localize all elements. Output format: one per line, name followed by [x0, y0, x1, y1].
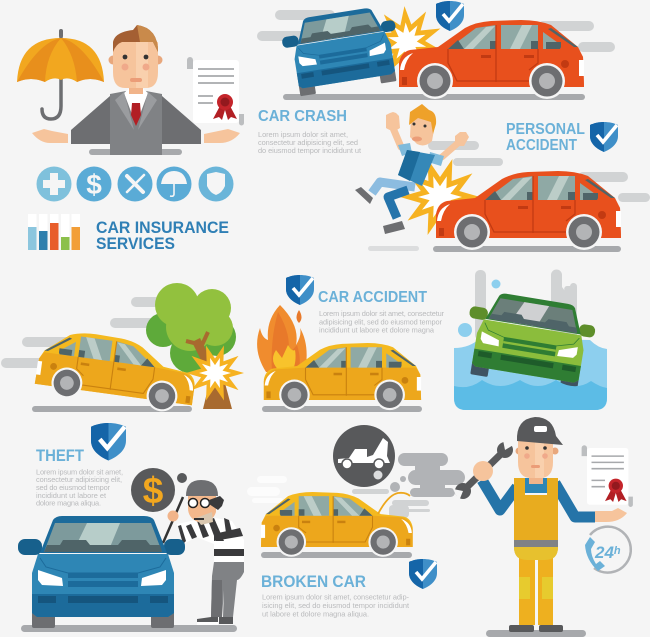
shield: broken car: [409, 559, 437, 589]
personal accident heading: [506, 121, 585, 154]
burst: personal accident: [400, 159, 480, 235]
flood scene: [454, 270, 607, 410]
certificate: [187, 57, 244, 126]
theft heading: THEFT: [36, 446, 85, 465]
red car: personal accident: [436, 171, 621, 250]
raised hood: [378, 493, 410, 514]
road: broken car: [261, 552, 412, 558]
shield: car accident: [286, 275, 314, 305]
yellow car: broken: [261, 492, 413, 557]
certificate: mechanic: [582, 445, 633, 507]
broken car text: ut labore et dolore magna aliqua.: [262, 610, 369, 618]
theft text: incididunt ut labore et: [36, 491, 106, 500]
icon: 24h support: h: [614, 545, 621, 557]
car accident text: [319, 309, 445, 334]
icon row: insurance services: [36, 166, 234, 202]
theft text: sed do eiusmod tempor: [36, 483, 111, 492]
tree: [146, 283, 236, 409]
red car: crash: [399, 20, 584, 99]
falling pedestrian: [355, 104, 469, 234]
personal accident heading: PERSONAL: [506, 121, 585, 138]
thought bubble: dollar: [131, 468, 187, 512]
heading: car insurance services: CAR INSURANCE: [96, 218, 229, 237]
yellow car: fire: [264, 343, 421, 410]
shield: theft: [91, 423, 126, 460]
shield: personal accident: [590, 122, 618, 152]
icon: 24h support: 24: [595, 543, 614, 562]
smoke trails: blue car and red car: [1, 10, 650, 368]
burst: tree: [186, 345, 244, 401]
theft text: consectetur adipisicing elit,: [36, 475, 122, 484]
icon: umbrella: [17, 29, 104, 119]
road: personal accident: [368, 246, 621, 252]
broken car heading: BROKEN CAR: [261, 572, 366, 591]
road: theft: [21, 625, 237, 632]
flame: [257, 305, 307, 372]
engine smoke: [352, 453, 465, 518]
steam: [247, 476, 287, 503]
mechanic: [453, 417, 627, 637]
blue car: crash: [279, 4, 404, 98]
road: car crash: [283, 94, 585, 100]
shield: car crash: [436, 1, 464, 31]
car accident text: Lorem ipsum dolor sit amet, consectetur: [319, 309, 445, 318]
theft text: Lorem ipsum dolor sit amet,: [36, 468, 123, 476]
car crash text: consectetur adipisicing elit, sed: [258, 138, 358, 147]
blue car: theft: [18, 516, 185, 628]
icon: 24h support: [585, 527, 631, 573]
icon row: insurance services: $: [86, 169, 102, 200]
car accident heading: CAR ACCIDENT: [318, 289, 427, 306]
road: tree crash: [32, 406, 192, 412]
heading: car insurance services: [96, 218, 229, 253]
theft text: dolore magna aliqua.: [36, 498, 101, 508]
broken car text: isicing elit, sed do eiusmod tempor incididunt: [262, 601, 409, 610]
theft text: [36, 468, 123, 508]
businessman: [32, 25, 240, 155]
car crash text: Lorem ipsum dolor sit amet,: [258, 130, 348, 139]
thought bubble: dollar: $: [143, 470, 164, 511]
car accident text: adipisicing elit, sed do eiusmod tempor: [319, 318, 443, 326]
broken car text: Lorem ipsum dolor sit amet, consectetur adip-: [262, 592, 410, 602]
tow truck badge: [333, 425, 395, 487]
heading: car insurance services: SERVICES: [96, 234, 175, 253]
car accident text: incididunt ut labore et dolore magna: [319, 326, 435, 334]
bar chart: [28, 214, 80, 250]
road: fire car: [262, 406, 422, 412]
burst: crash: [364, 0, 450, 84]
yellow car: tree crash: [33, 327, 200, 415]
car crash text: [258, 130, 361, 155]
broken car text: [262, 592, 410, 618]
personal accident heading: ACCIDENT: [506, 137, 577, 154]
car crash text: do eiusmod tempor incididunt ut: [258, 146, 361, 155]
car crash heading: CAR CRASH: [258, 108, 347, 125]
thief: [163, 480, 244, 625]
